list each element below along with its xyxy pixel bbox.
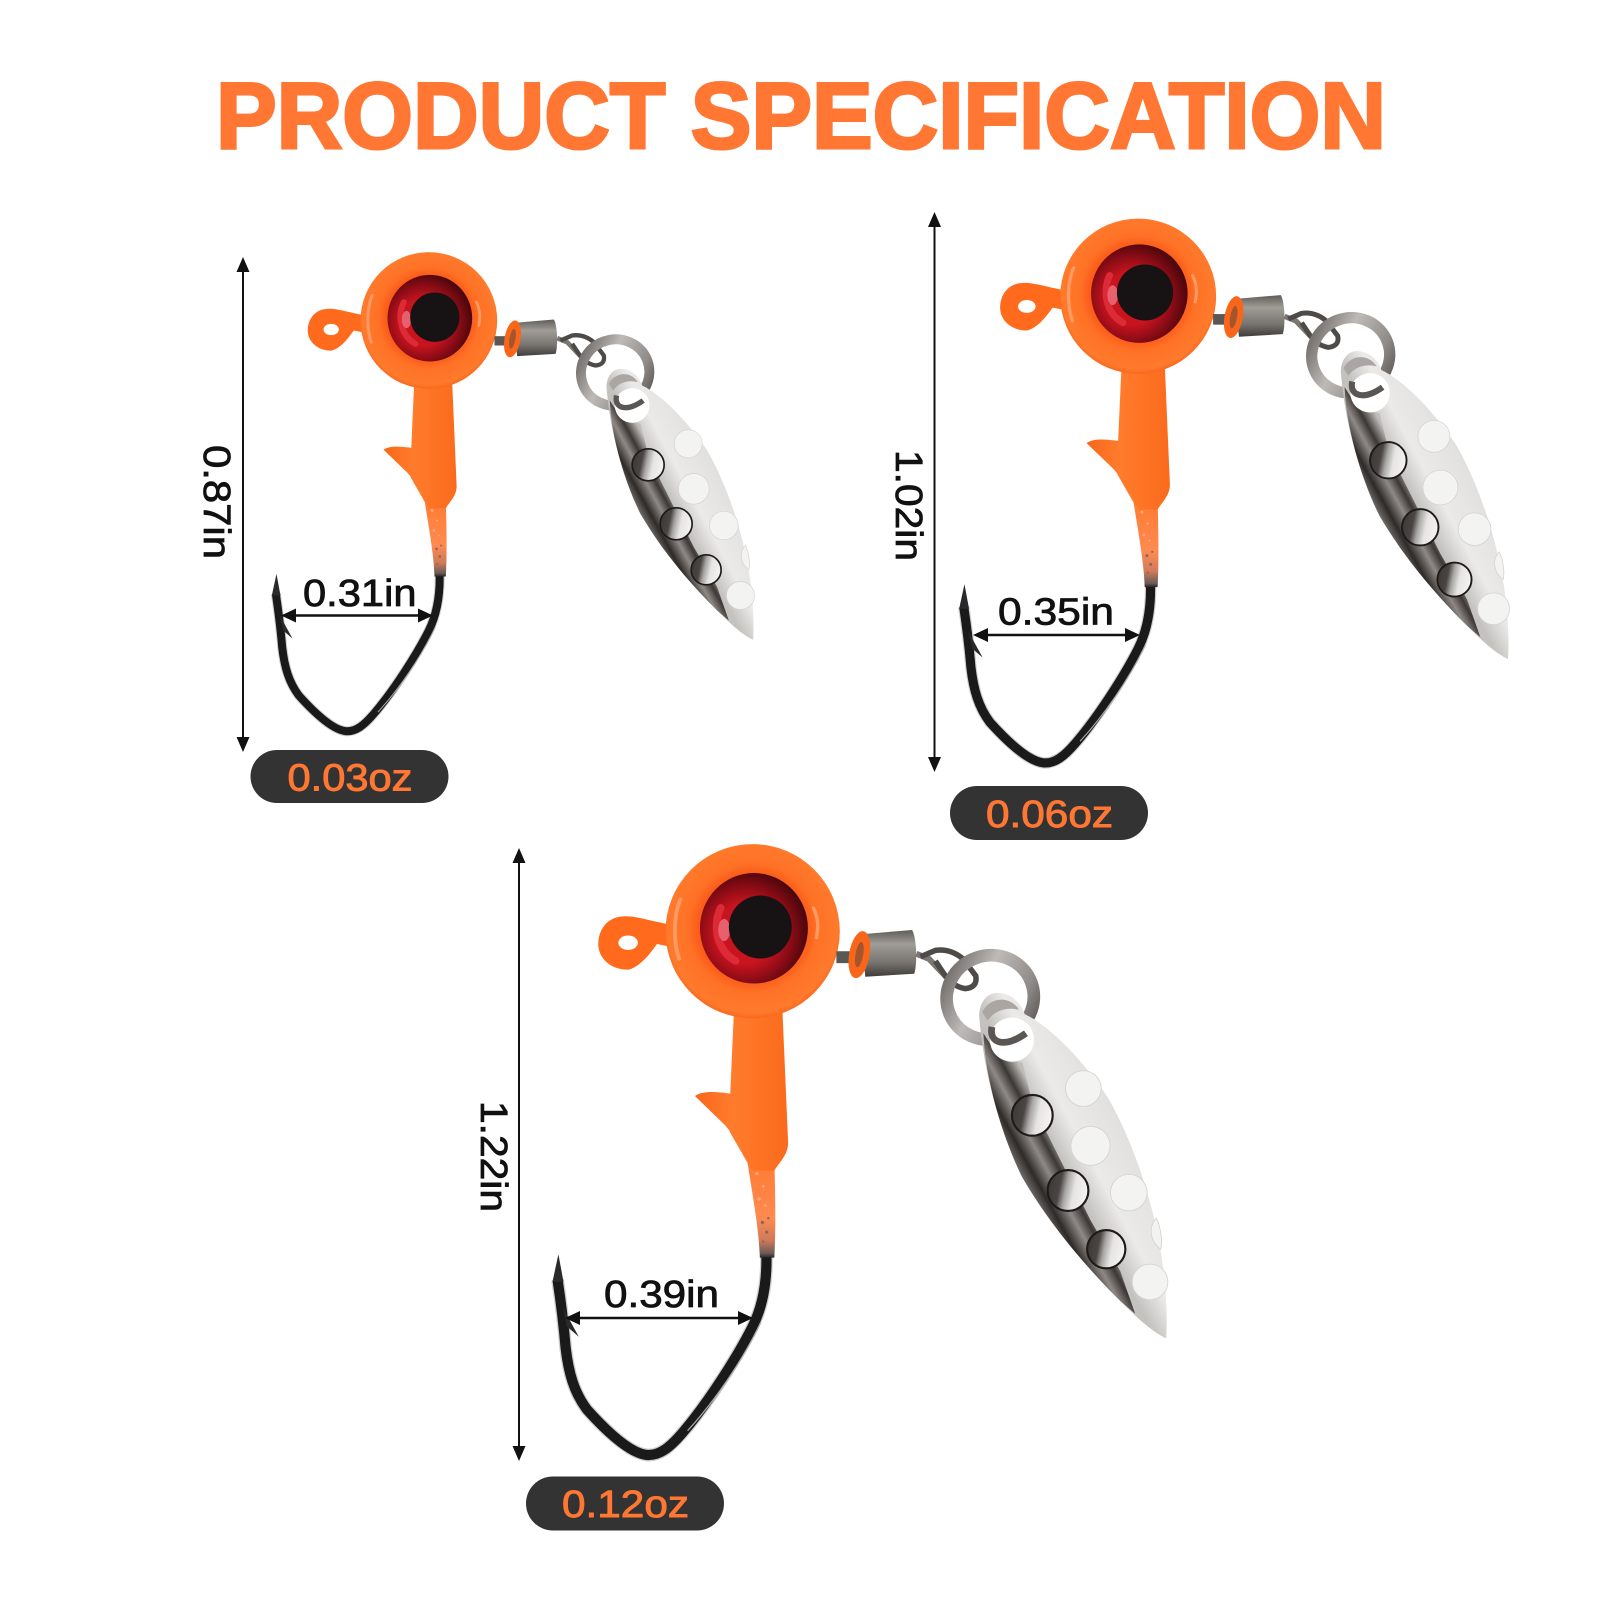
icon: 0.12oz jig head lure with blade bbox=[552, 844, 1168, 1455]
height arrow bbox=[236, 257, 250, 752]
hook gap label: 0.31in bbox=[303, 573, 416, 615]
hook gap label: 0.35in bbox=[998, 592, 1114, 634]
height arrow bbox=[512, 848, 526, 1461]
weight badge: 0.06oz bbox=[986, 794, 1113, 836]
icon: 0.03oz jig head lure with blade bbox=[272, 252, 754, 731]
height label: 1.22in bbox=[472, 1101, 514, 1212]
weight badge bbox=[526, 1476, 724, 1530]
panel: 0.12oz jig bbox=[472, 844, 1168, 1530]
weight badge: 0.03oz bbox=[288, 758, 412, 800]
height label: 0.87in bbox=[195, 445, 237, 559]
weight badge bbox=[250, 750, 448, 803]
hook gap label: 0.39in bbox=[604, 1274, 719, 1316]
height label: 1.02in bbox=[887, 450, 929, 561]
hook gap arrow bbox=[281, 608, 433, 622]
title: PRODUCT SPECIFICATION bbox=[216, 63, 1386, 168]
height arrow bbox=[928, 212, 941, 772]
hook gap arrow bbox=[973, 628, 1140, 642]
panel: 0.06oz jig bbox=[887, 212, 1510, 840]
hook gap arrow bbox=[565, 1311, 753, 1325]
weight badge bbox=[950, 786, 1148, 840]
panel: 0.03oz jig bbox=[195, 252, 754, 803]
weight badge: 0.12oz bbox=[562, 1484, 689, 1526]
icon: 0.06oz jig head lure with blade bbox=[959, 219, 1510, 763]
